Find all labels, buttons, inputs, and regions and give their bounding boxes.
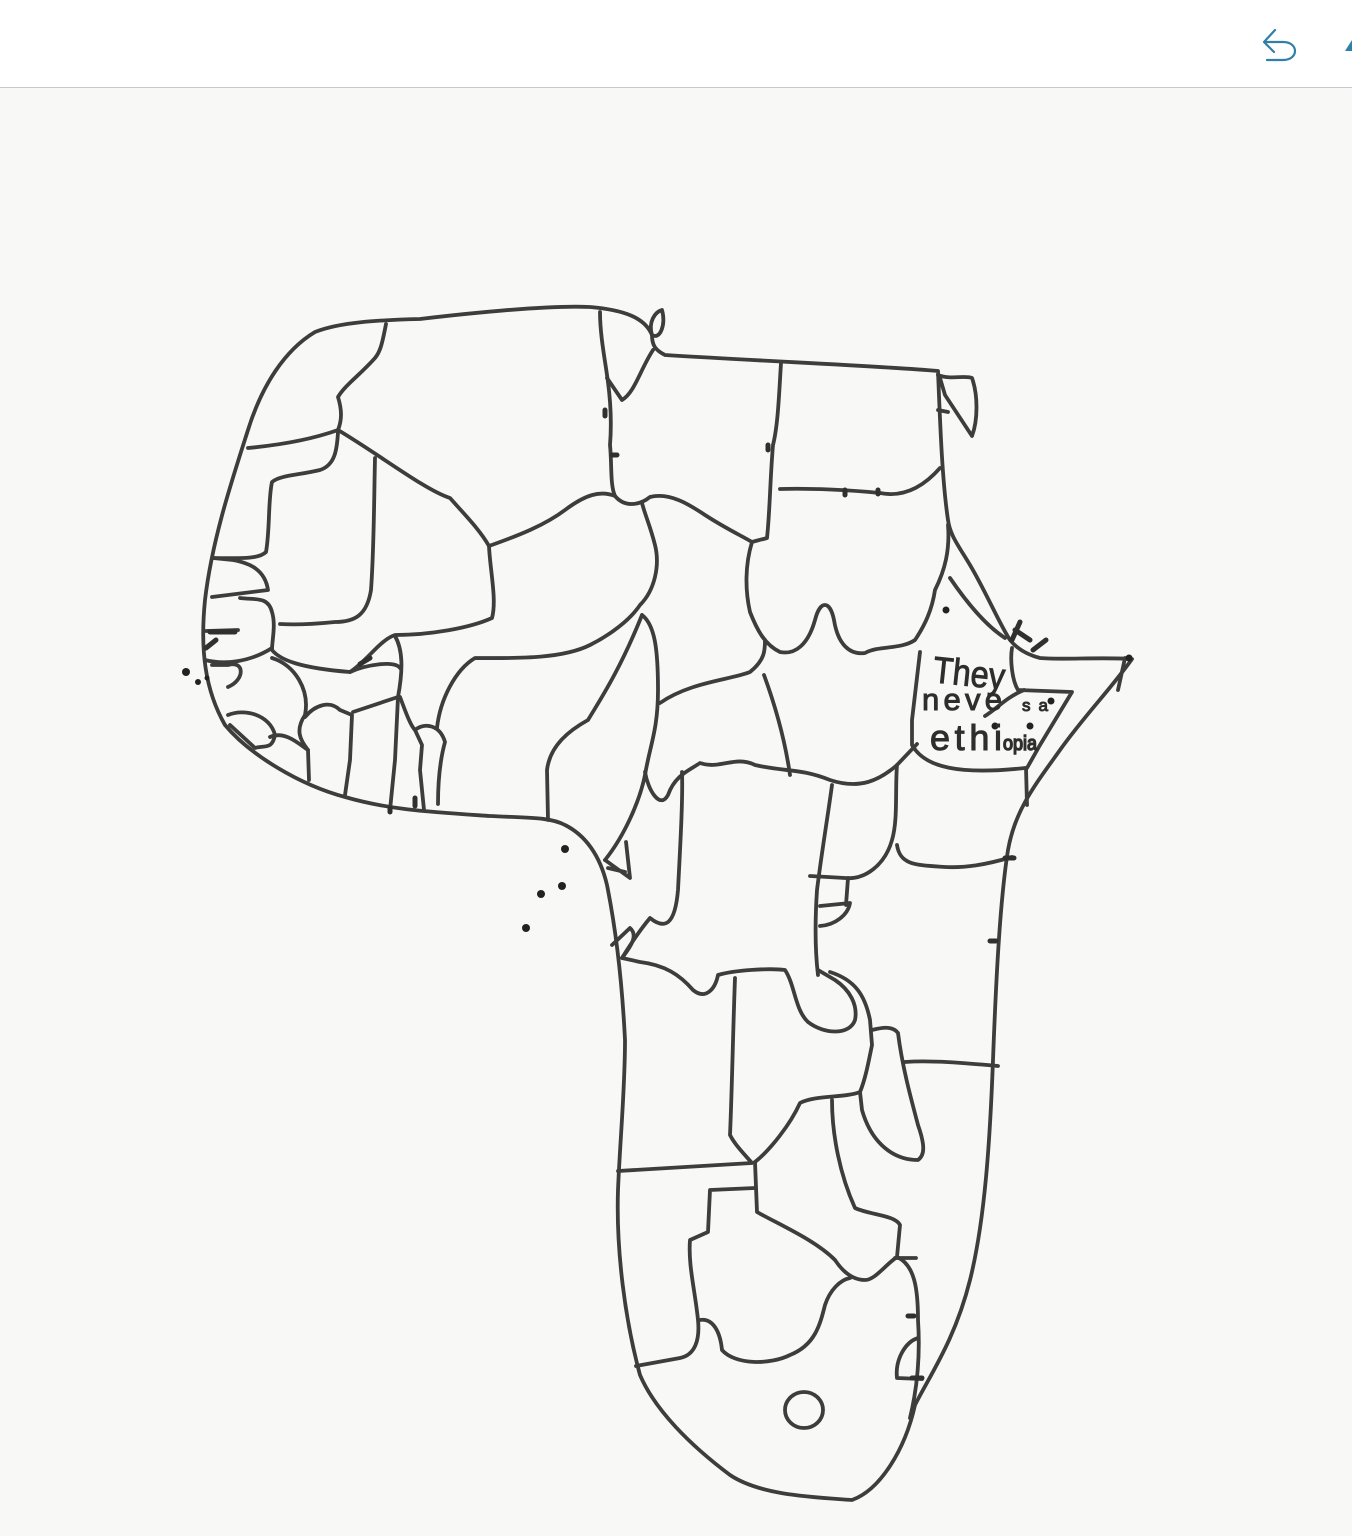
Northwest borders	[248, 324, 386, 448]
map: hand-drawn outline of Africa	[203, 307, 1132, 1500]
top toolbar	[0, 0, 1352, 88]
handwritten note in Ethiopia: They	[931, 649, 1007, 698]
Lesotho ring	[785, 1392, 823, 1428]
dots: small marks in Ethiopia area	[942, 606, 1132, 730]
icon: toolbar triangle	[1345, 40, 1352, 51]
handwritten note in Ethiopia: ethi	[930, 717, 1002, 758]
handwritten note in Ethiopia: sa	[1022, 696, 1049, 715]
handwritten note in Ethiopia: opia	[1003, 733, 1038, 755]
dots: Gulf islands	[522, 845, 569, 932]
thick border ticks	[206, 410, 1046, 1378]
dots: Cape Verde islands	[182, 668, 210, 685]
handwritten note in Ethiopia: neve	[922, 682, 1002, 717]
islands and dots	[182, 606, 1132, 932]
continent outline	[203, 307, 1132, 1500]
icon: undo arrow	[1264, 30, 1295, 60]
handwritten note in Ethiopia	[922, 649, 1049, 758]
